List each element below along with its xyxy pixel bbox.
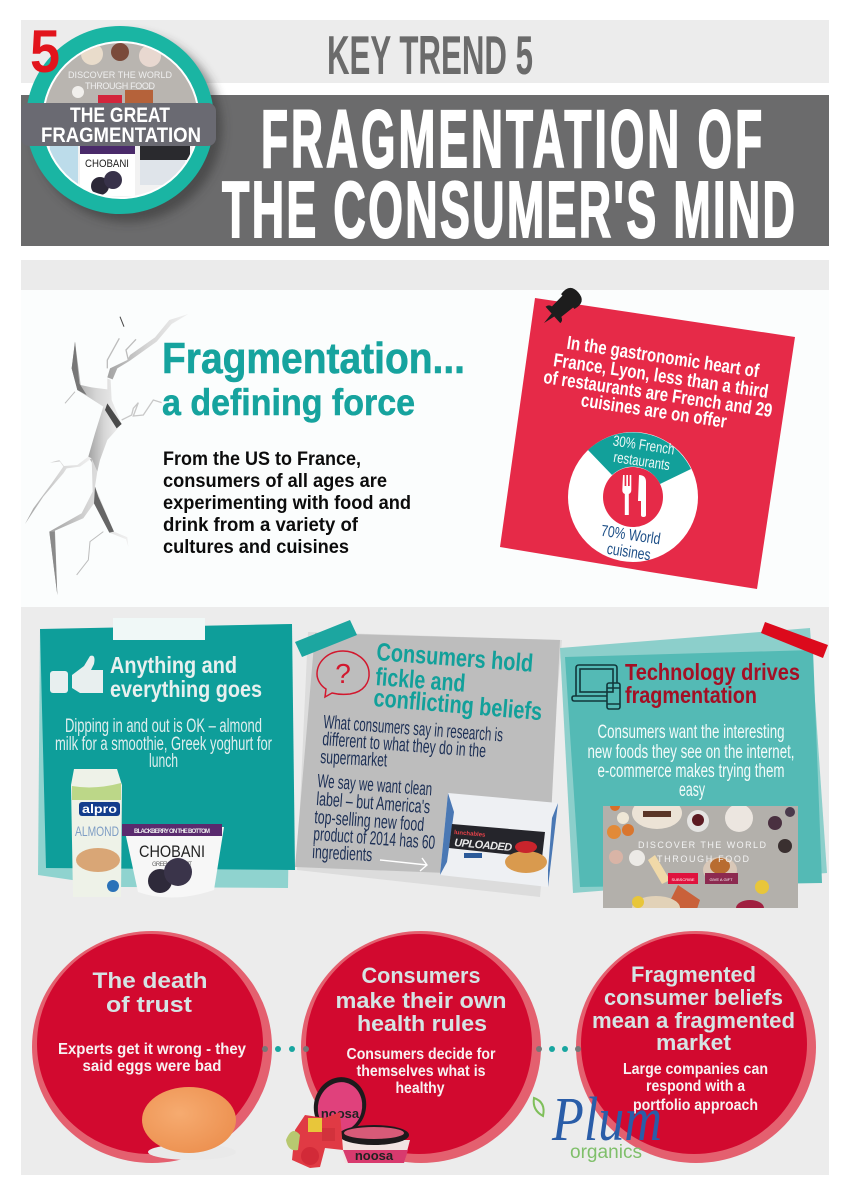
- text: body: [346, 1046, 496, 1097]
- heading: fragmentation a defining force: a defining force: [162, 382, 415, 423]
- arrow: [380, 858, 427, 871]
- illustration: wall crack: [25, 314, 188, 595]
- product: chobani yoghurt: BLACKBERRY ON THE BOTTOM: [134, 829, 210, 835]
- text: body: We say we want clean: [317, 771, 433, 800]
- product: noosa yoghurt and fruit: noosa: [355, 1148, 394, 1163]
- text: body: [55, 716, 272, 772]
- text: lyon fact: In the gastronomic heart of: [565, 333, 761, 382]
- product: alpro almond carton: ALMOND: [75, 823, 119, 839]
- spacer grey band: [21, 260, 829, 290]
- panel: lyon sticky note: [500, 284, 795, 589]
- logo: plum organics: Plum: [551, 1086, 662, 1154]
- text: lyon fact: cuisines are on offer: [580, 390, 729, 433]
- heading: [110, 652, 262, 702]
- product: lunchables uploaded: UPLOADED: [454, 837, 513, 854]
- section background: cards and circles: [21, 607, 829, 1175]
- text: body: What consumers say in research is: [323, 712, 504, 746]
- icon: question bubble: [317, 651, 369, 697]
- connector dots 1: [262, 1046, 309, 1052]
- heading: [592, 962, 795, 1055]
- heading: market: [656, 1030, 732, 1055]
- logo: plum organics: organics: [570, 1142, 642, 1163]
- badge: the great fragmentation: THE GREAT: [70, 104, 170, 127]
- title: [222, 92, 795, 254]
- donut chart: restaurants: 30% French: [612, 433, 676, 459]
- heading: Consumers hold: [376, 638, 534, 678]
- badge: the great fragmentation: FRAGMENTATION: [41, 124, 201, 147]
- circle: death of trust: [32, 931, 272, 1163]
- heading: The death: [92, 968, 208, 993]
- panel: fickle beliefs: [295, 620, 562, 897]
- heading: [372, 638, 543, 726]
- product: chobani yoghurt: [122, 824, 224, 898]
- text: intro paragraph: consumers of all ages are: [163, 471, 387, 492]
- text: body: label – but America's: [316, 789, 431, 818]
- text: body: said eggs were bad: [82, 1058, 222, 1075]
- badge: the great fragmentation: [21, 26, 222, 222]
- text: body: Consumers decide for: [346, 1046, 496, 1063]
- product: lunchables uploaded: lunchables: [454, 830, 486, 839]
- panel: technology drives fragmentation: [560, 622, 828, 920]
- donut chart: restaurants: [568, 432, 698, 564]
- badge: the great fragmentation: CHOBANI: [85, 158, 129, 170]
- dark title band: [21, 95, 829, 246]
- image: discover the world food photo: DISCOVER THE WORLD: [638, 840, 766, 850]
- text: body: [588, 722, 794, 801]
- label: key trend 5: KEY TREND 5: [327, 24, 533, 86]
- text: body: themselves what is: [356, 1063, 486, 1080]
- product: chobani yoghurt: GREEK YOGURT: [152, 862, 192, 868]
- heading: everything goes: [110, 676, 262, 702]
- product: chobani yoghurt: CHOBANI: [139, 842, 205, 861]
- connector dots 2: [536, 1046, 581, 1052]
- section background: intro: [21, 290, 829, 607]
- text: lyon fact: [542, 333, 774, 433]
- heading: conflicting beliefs: [372, 684, 543, 726]
- text: body: Large companies can: [623, 1061, 768, 1078]
- text: body: milk for a smoothie, Greek yoghurt for: [55, 734, 272, 755]
- text: lyon fact: France, Lyon, less than a third: [552, 350, 770, 403]
- text: body: [312, 712, 504, 866]
- heading: Fragmented: [631, 962, 756, 987]
- circle: fragmented market: [576, 931, 816, 1163]
- text: body: top-selling new food: [314, 807, 425, 836]
- text: body: ingredients: [312, 842, 373, 866]
- icon: fork and knife: [622, 475, 646, 517]
- product: alpro almond carton: [71, 769, 122, 897]
- icon: thumbs up: [50, 656, 103, 693]
- badge: the great fragmentation: THROUGH FOOD: [85, 81, 156, 91]
- image: discover the world food photo: GIVE A GIFT: [709, 877, 733, 882]
- heading: Anything and: [110, 652, 237, 678]
- number 5: 5: [30, 18, 60, 85]
- image: discover the world food photo: [603, 806, 798, 908]
- text: intro paragraph: drink from a variety of: [163, 515, 359, 536]
- text: body: respond with a: [646, 1078, 745, 1095]
- text: body: different to what they do in the: [322, 729, 487, 762]
- text: body: healthy: [396, 1080, 445, 1097]
- text: intro paragraph: cultures and cuisines: [163, 537, 349, 558]
- heading: [625, 659, 800, 708]
- title: FRAGMENTATION OF: [261, 92, 762, 184]
- text: body: Dipping in and out is OK – almond: [65, 716, 262, 737]
- product: noosa yoghurt and fruit: [286, 1071, 410, 1168]
- icon: question bubble: ?: [335, 658, 351, 689]
- text: body: [58, 1041, 246, 1075]
- icon: push pin: [537, 284, 586, 331]
- heading: Technology drives: [625, 659, 800, 685]
- text: lyon fact: of restaurants are French and 29: [542, 367, 774, 422]
- image: discover the world food photo: THROUGH FOOD: [657, 854, 750, 864]
- text: body: portfolio approach: [633, 1097, 758, 1114]
- product: lunchables uploaded: [440, 793, 558, 887]
- heading: [92, 968, 208, 1017]
- circle: consumers make their own health rules: [286, 931, 541, 1168]
- heading: fickle and: [375, 663, 466, 698]
- panel: anything and everything goes: [38, 618, 295, 898]
- text: intro paragraph: [163, 449, 411, 558]
- text: intro paragraph: experimenting with food and: [163, 493, 411, 514]
- donut chart: restaurants: 70% World: [600, 523, 662, 548]
- text: body: easy: [679, 780, 705, 801]
- product: noosa yoghurt and fruit: noosa: [321, 1106, 360, 1121]
- heading: fragmentation a defining force: Fragmentation...: [162, 334, 465, 383]
- text: body: supermarket: [320, 747, 388, 772]
- text: intro paragraph: From the US to France,: [163, 449, 361, 470]
- image: discover the world food photo: SUBSCRIBE: [671, 877, 695, 882]
- heading: [336, 963, 506, 1036]
- product: alpro almond carton: alpro: [82, 802, 117, 816]
- heading: mean a fragmented: [592, 1008, 795, 1033]
- top grey band: [21, 20, 829, 83]
- heading: health rules: [357, 1011, 487, 1036]
- heading: fragmentation a defining force: [162, 334, 465, 423]
- donut chart: restaurants: restaurants: [612, 449, 671, 474]
- badge: the great fragmentation: DISCOVER THE WORLD: [68, 70, 172, 80]
- heading: fragmentation: [625, 682, 757, 708]
- heading: consumer beliefs: [604, 985, 783, 1010]
- icon: laptop and phone: [572, 665, 620, 709]
- text: body: product of 2014 has 60: [313, 824, 436, 854]
- logo: plum organics: [534, 1086, 662, 1163]
- heading: make their own: [336, 988, 506, 1013]
- donut chart: restaurants: cuisines: [606, 541, 652, 564]
- heading: of trust: [106, 992, 193, 1017]
- text: body: [623, 1061, 768, 1114]
- text: body: lunch: [149, 751, 178, 772]
- image: egg: [142, 1087, 236, 1160]
- text: body: Experts get it wrong - they: [58, 1041, 246, 1058]
- heading: Consumers: [362, 963, 480, 988]
- title: THE CONSUMER'S MIND: [222, 164, 795, 254]
